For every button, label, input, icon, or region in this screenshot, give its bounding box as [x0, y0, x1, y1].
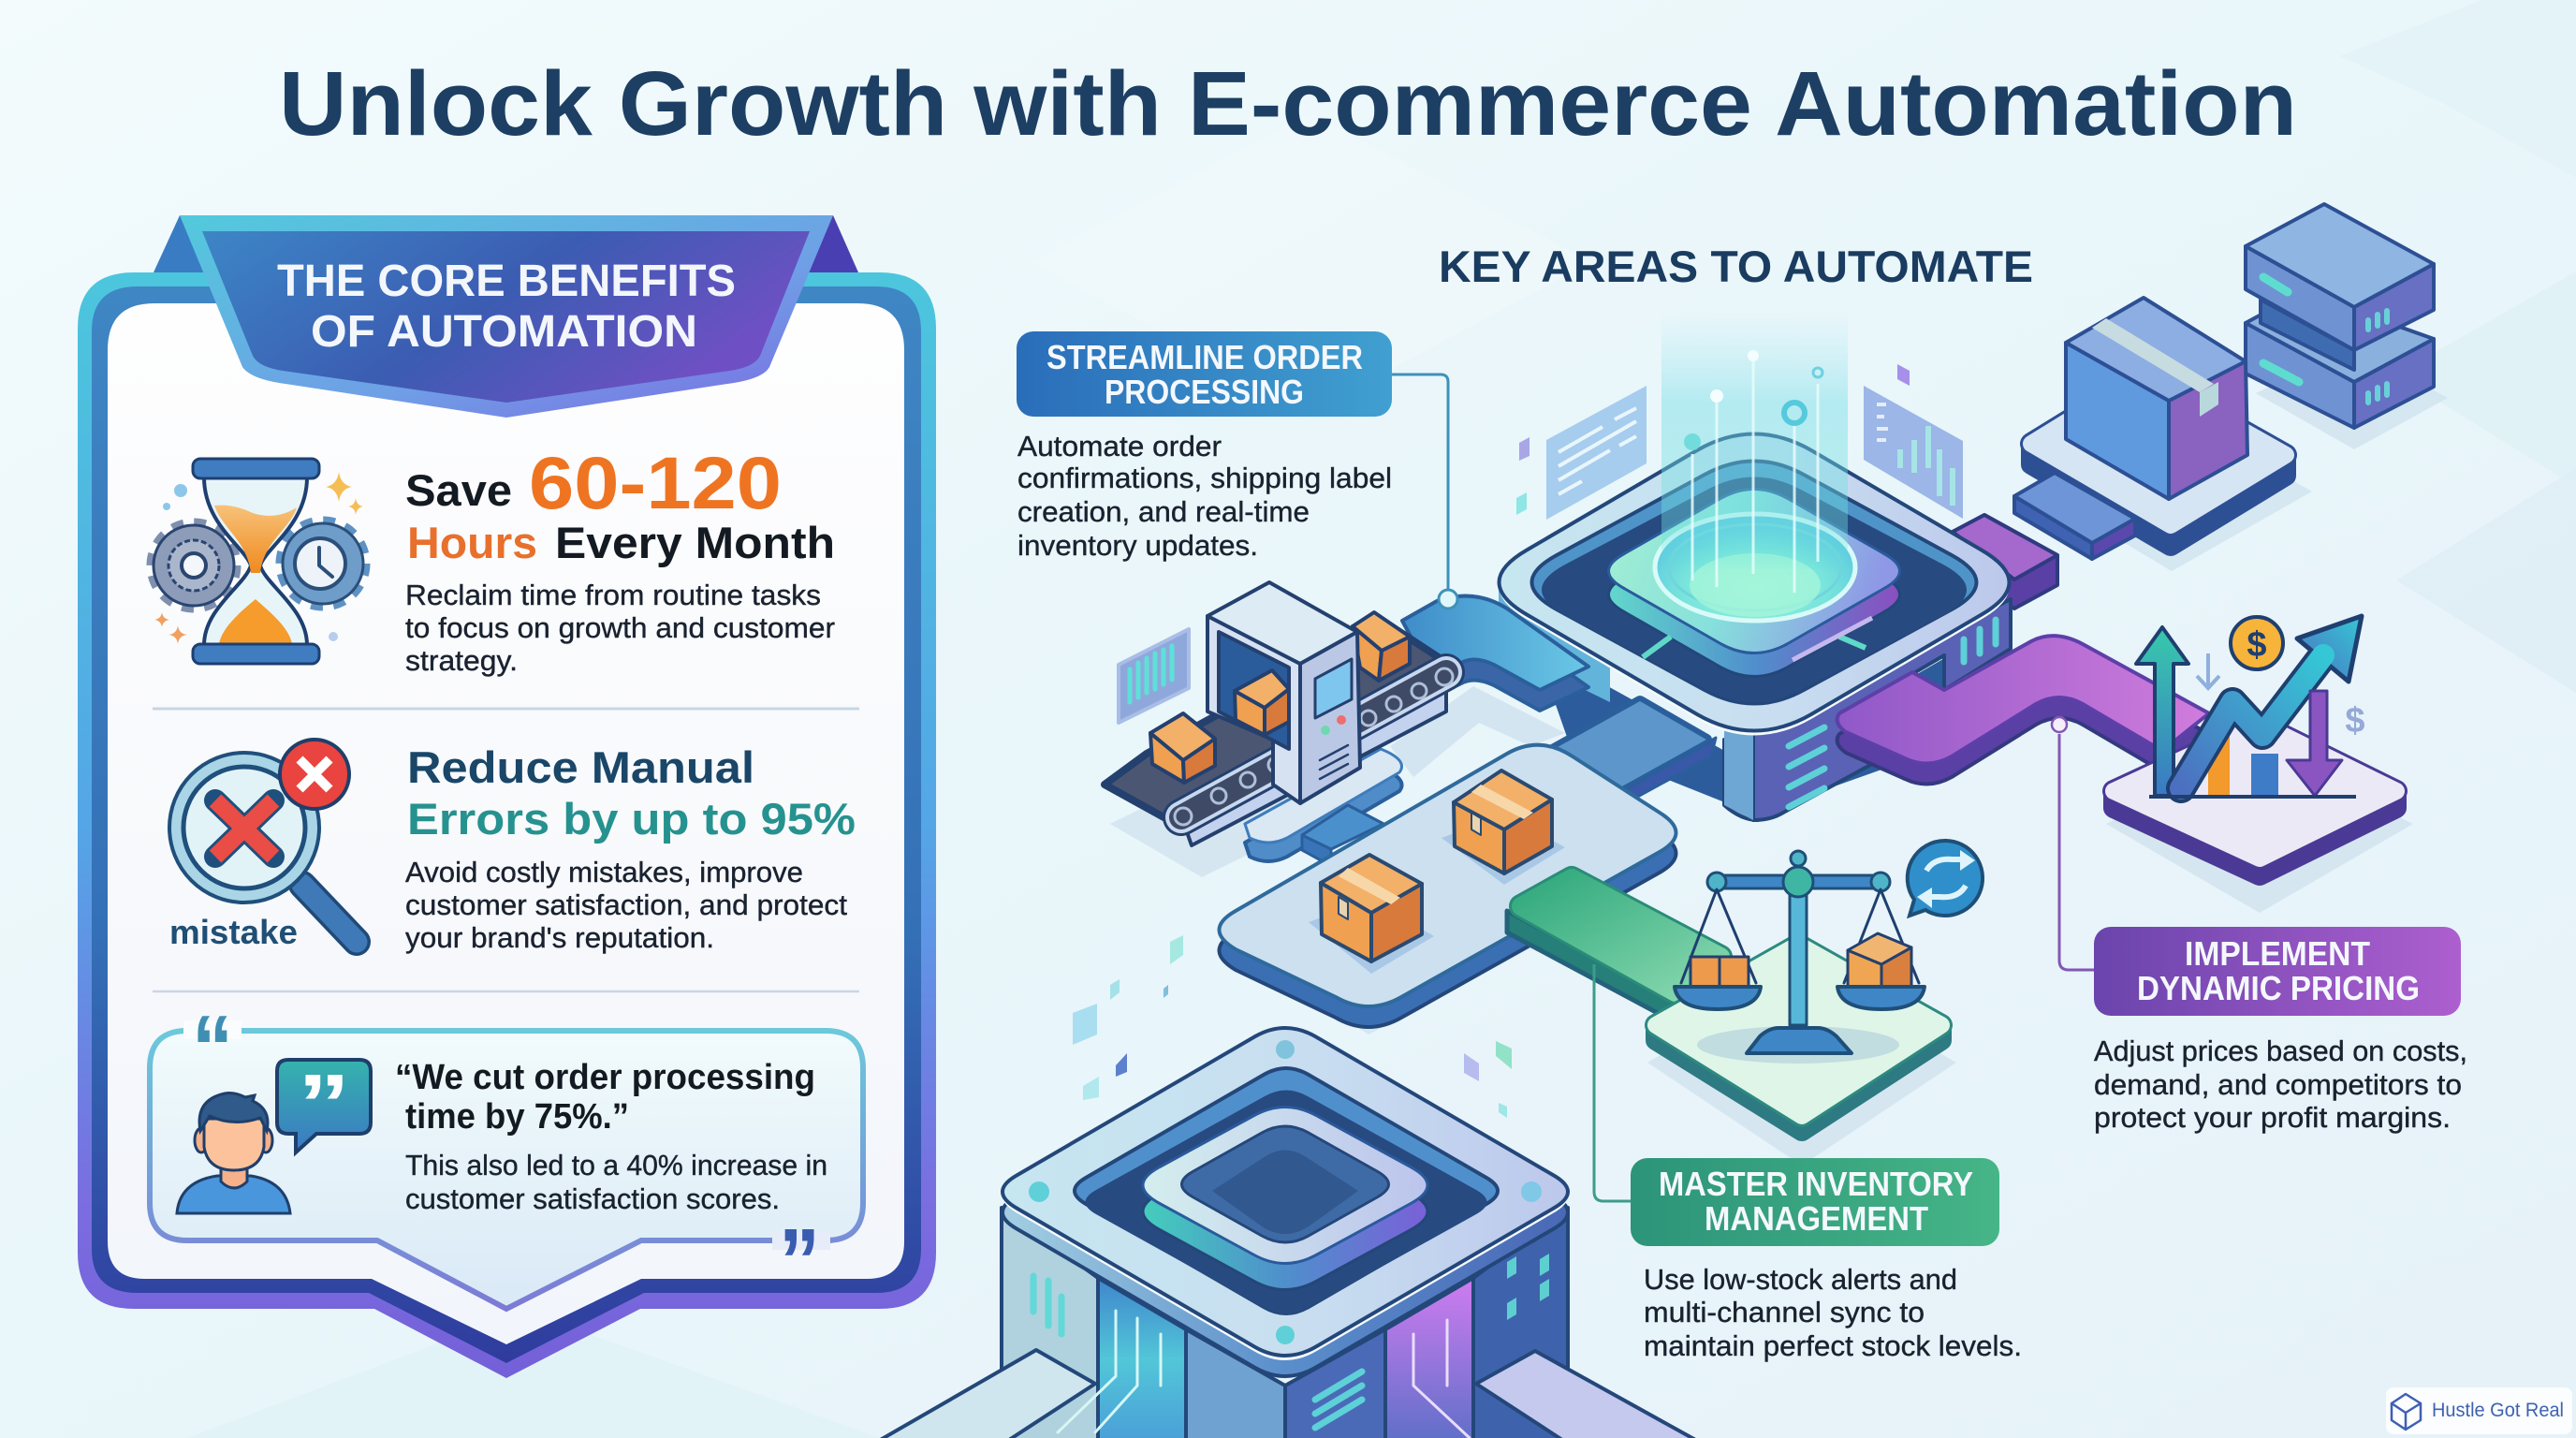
quote text	[395, 1058, 815, 1137]
tag	[1631, 1158, 1999, 1246]
illustration: isometric automation system	[877, 204, 2448, 1438]
connector: dynamic pricing	[2052, 717, 2094, 970]
platform shadows	[1110, 346, 2448, 1166]
heading banner: OF AUTOMATION	[311, 307, 697, 357]
tag: PROCESSING	[1105, 373, 1304, 411]
panel: core benefits	[78, 215, 936, 1378]
axis	[2149, 795, 2356, 799]
benefit 2 text: your brand's reputation.	[405, 921, 714, 954]
small floating squares	[1073, 364, 1910, 1118]
bottom data block	[877, 1028, 1699, 1438]
closing quote mark: ”	[779, 1210, 820, 1313]
blue connector pipe	[1402, 596, 1588, 711]
machine back and opening	[1208, 616, 1300, 803]
tag: STREAMLINE ORDER	[1046, 338, 1363, 376]
central automation hub	[1402, 312, 2011, 820]
quote supporting text: customer satisfaction scores.	[405, 1182, 780, 1215]
hologram beam	[1661, 312, 1848, 593]
benefit 2 heading: Reduce Manual	[407, 742, 754, 792]
dynamic pricing connector pipe	[1837, 636, 2209, 785]
connector: streamline order	[1392, 374, 1457, 609]
tag: MASTER INVENTORY	[1659, 1165, 1973, 1203]
connector: inventory	[1594, 964, 1631, 1201]
server stack	[2246, 204, 2434, 428]
tag	[2094, 927, 2461, 1016]
benefit 1 heading: 60-120	[529, 441, 782, 524]
quote text: “We cut order processing	[395, 1058, 815, 1097]
description: creation, and real-time	[1017, 495, 1310, 528]
benefit 1 text: to focus on growth and customer	[405, 611, 835, 644]
coin: $	[2247, 625, 2267, 665]
description	[1644, 1263, 2022, 1362]
block recess	[1075, 1068, 1498, 1313]
benefit 1 text: strategy.	[405, 644, 518, 677]
description: demand, and competitors to	[2094, 1068, 2462, 1101]
hub inner platform	[1608, 489, 1900, 676]
hub lid	[1500, 434, 2009, 736]
block chip	[1143, 1107, 1427, 1290]
blue tab below hub	[1536, 701, 1716, 811]
description	[1017, 430, 1392, 562]
description: maintain perfect stock levels.	[1644, 1329, 2022, 1362]
pale floor between conveyor and hub	[1390, 686, 1565, 777]
benefit 1 heading: Every Month	[555, 518, 835, 567]
heading banner: THE CORE BENEFITS	[277, 257, 736, 306]
icon: magnifier with error mark: mistake	[169, 913, 298, 951]
package box	[1454, 770, 1552, 873]
icon: person with speech bubble: ”	[298, 1058, 350, 1152]
icon: cube logo	[2392, 1394, 2421, 1430]
benefit 2 text	[405, 856, 847, 954]
icon: magnifier with error mark	[169, 740, 357, 951]
card: dynamic pricing	[2094, 927, 2467, 1134]
hub underside and columns	[1499, 582, 2011, 820]
quote text: time by 75%.”	[405, 1097, 629, 1137]
description: Use low-stock alerts and	[1644, 1263, 1957, 1296]
floating dashboard panels	[1546, 386, 1963, 520]
icon: hourglass with gears	[154, 459, 363, 664]
chart bars	[2208, 737, 2230, 796]
quote supporting text	[405, 1149, 827, 1215]
down arrow	[2287, 691, 2342, 796]
large box and server stack	[2014, 204, 2434, 559]
icon: person with speech bubble	[177, 1058, 371, 1213]
watermark	[2386, 1387, 2572, 1434]
opening quote mark: “	[192, 996, 233, 1099]
icon: sync bubble	[1908, 841, 1983, 916]
description	[2094, 1034, 2467, 1134]
heading banner	[154, 215, 858, 418]
coin	[2231, 617, 2283, 669]
card: inventory management	[1631, 1158, 2022, 1362]
heading: key areas: KEY AREAS TO AUTOMATE	[1439, 242, 2033, 291]
box on conveyor	[1235, 670, 1289, 735]
description: Adjust prices based on costs,	[2094, 1034, 2467, 1067]
benefit 1 heading: Save	[405, 465, 512, 515]
conveyor platform	[1245, 749, 1402, 866]
benefit 2 heading: Errors by up to 95%	[407, 794, 856, 844]
benefit 2 heading	[407, 742, 856, 844]
benefit 1 heading	[405, 441, 835, 567]
block lid	[1003, 1049, 1568, 1376]
small tab	[2014, 496, 2092, 559]
balance scale	[1675, 851, 1925, 1053]
up arrow	[2136, 627, 2188, 796]
box on conveyor	[1353, 612, 1410, 681]
quote supporting text: This also led to a 40% increase in	[405, 1149, 827, 1181]
package box	[1321, 855, 1422, 961]
block wall panels	[1002, 1208, 1568, 1438]
testimonial callout	[150, 996, 863, 1313]
green connector bar	[1507, 878, 1720, 1025]
bottom walkways	[877, 1350, 1699, 1438]
zigzag growth arrow	[2181, 616, 2362, 788]
description: confirmations, shipping label	[1017, 462, 1392, 494]
benefit 1 text: Reclaim time from routine tasks	[405, 579, 821, 611]
description: inventory updates.	[1017, 529, 1258, 562]
benefit 2 text: customer satisfaction, and protect	[405, 888, 847, 921]
tag: MANAGEMENT	[1705, 1199, 1928, 1238]
benefit 1 text	[405, 579, 835, 677]
box on conveyor	[1150, 713, 1215, 783]
box platform	[2031, 444, 2286, 546]
purple connector behind hub	[1953, 515, 2057, 609]
watermark: Hustle Got Real	[2432, 1400, 2564, 1421]
title: Unlock Growth with E-commerce Automation	[279, 52, 2297, 154]
description: multi-channel sync to	[1644, 1296, 1925, 1328]
middle platform with boxes	[1219, 745, 1676, 1027]
big parcel	[2066, 343, 2169, 499]
tag	[1017, 331, 1392, 417]
conveyor machine	[1105, 582, 1453, 845]
benefit 2 text: Avoid costly mistakes, improve	[405, 856, 803, 888]
small dollar sign: $	[2345, 701, 2365, 741]
description: protect your profit margins.	[2094, 1101, 2451, 1134]
hub recess	[1531, 461, 1977, 704]
tag: DYNAMIC PRICING	[2137, 969, 2420, 1007]
pricing platform with chart	[2114, 616, 2396, 875]
tag: IMPLEMENT	[2185, 934, 2370, 973]
inventory platform with scale	[1656, 841, 1983, 1131]
card: streamline order processing	[1017, 331, 1392, 562]
description: Automate order	[1017, 430, 1222, 462]
benefit 1 heading: Hours	[407, 518, 537, 567]
